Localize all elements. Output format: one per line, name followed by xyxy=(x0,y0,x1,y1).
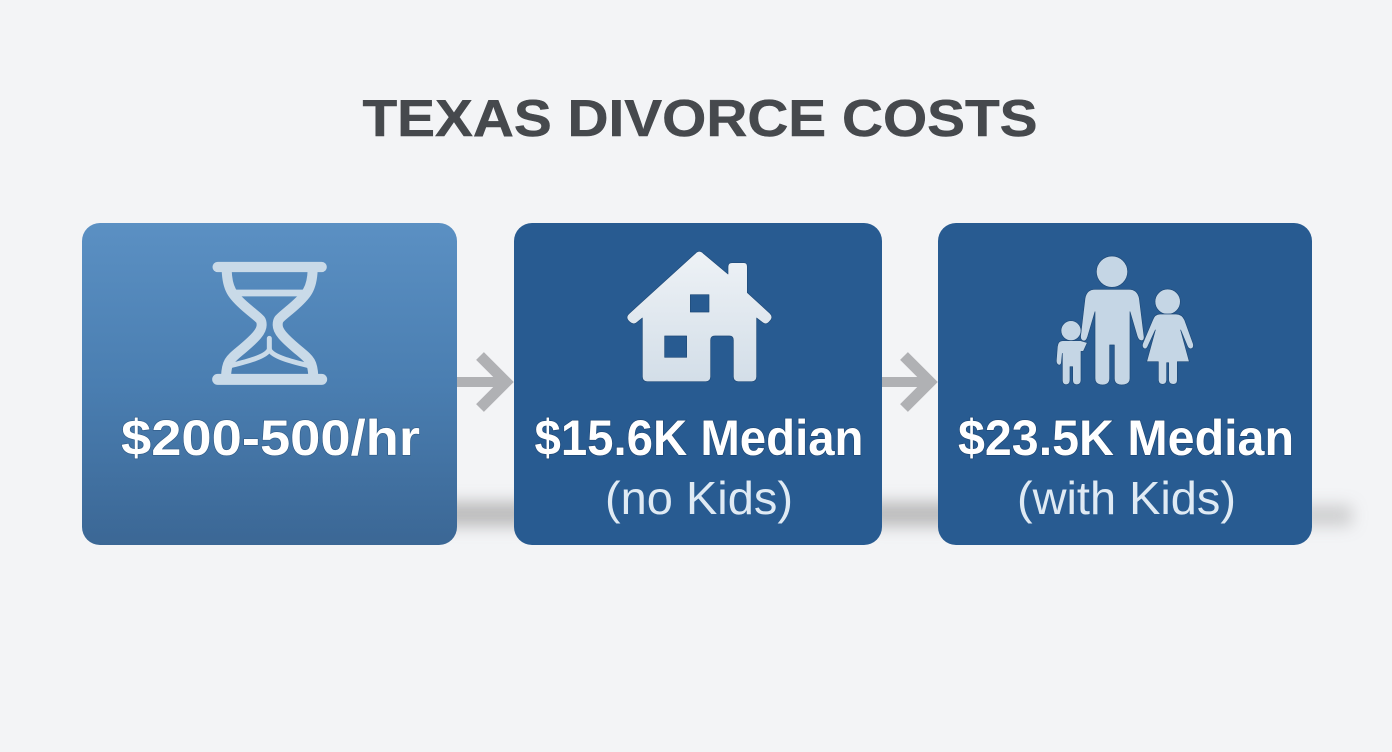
arrow: hourly to no kids xyxy=(457,356,508,408)
icon: house xyxy=(627,251,772,382)
sublabel: with kids: (with Kids) xyxy=(1017,472,1236,524)
panel: hourly rate xyxy=(82,223,457,545)
panel: median with kids xyxy=(938,223,1312,545)
sublabel: no kids: (no Kids) xyxy=(605,472,793,524)
girl xyxy=(1142,289,1193,384)
label: hourly rate: $200-500/hr xyxy=(121,410,420,466)
title: TEXAS DIVORCE COSTS xyxy=(362,90,1038,148)
icon: family xyxy=(1056,256,1193,385)
boy xyxy=(1056,321,1087,385)
adult xyxy=(1081,256,1144,385)
icon: hourglass xyxy=(218,267,322,379)
panel: median no kids xyxy=(514,223,882,545)
panel shadows xyxy=(440,502,1352,526)
label: median no kids: $15.6K Median xyxy=(534,410,864,466)
arrow: no kids to with kids xyxy=(882,356,930,408)
label: median with kids: $23.5K Median xyxy=(958,410,1294,466)
